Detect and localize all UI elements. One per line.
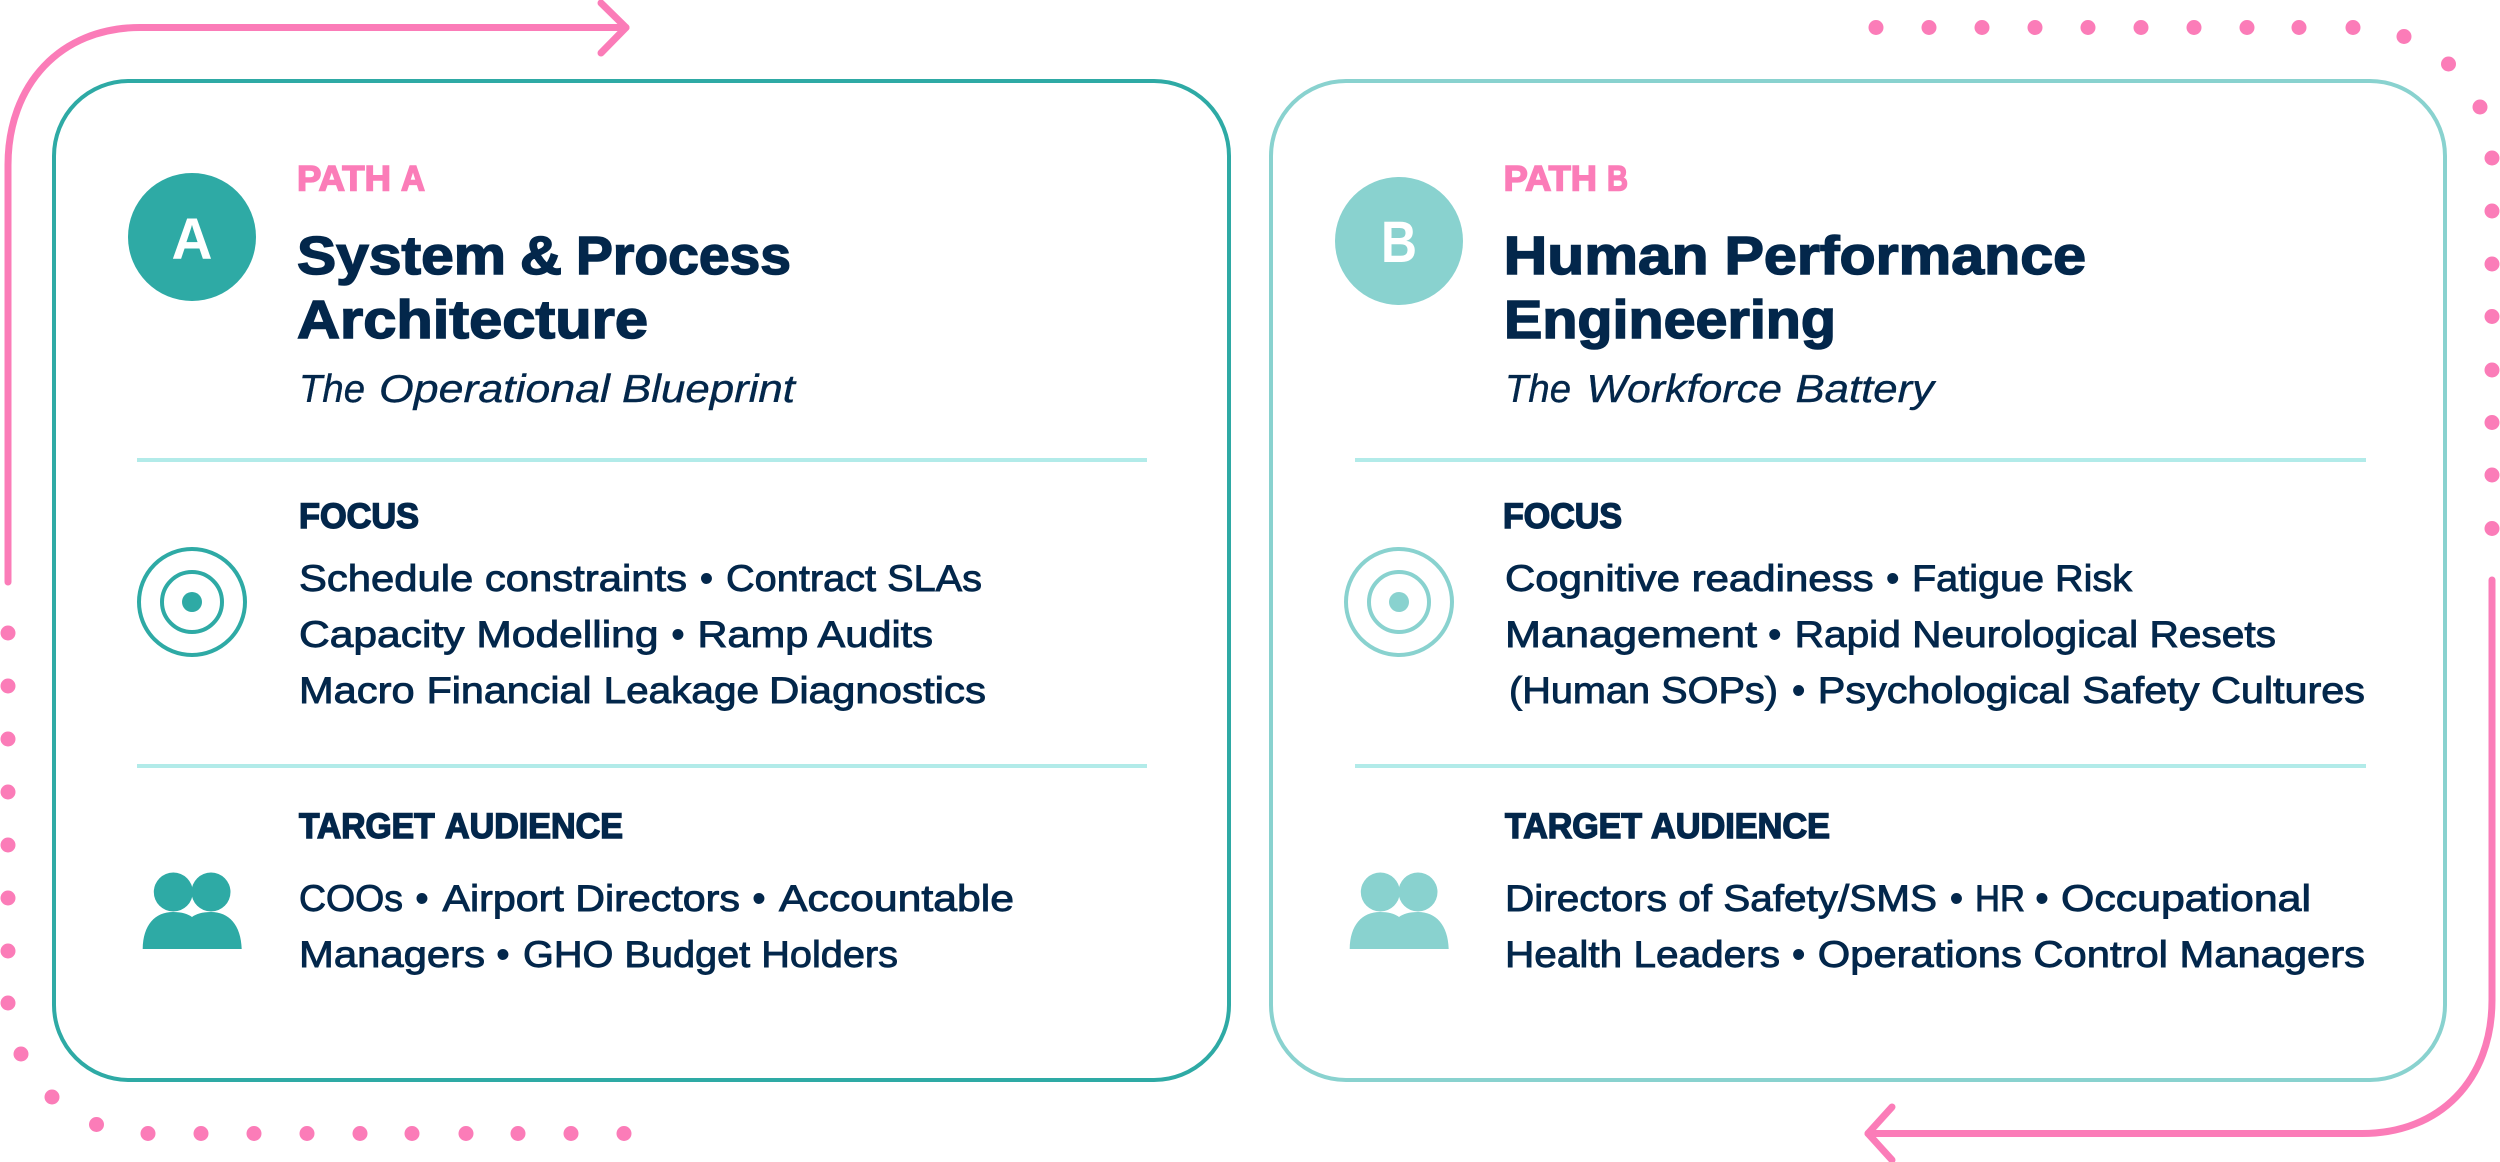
audience section A: Airport Directors [442, 878, 740, 919]
audience section B: HR [1975, 878, 2025, 919]
focus section B: • [1792, 670, 1805, 711]
card outline B [1271, 81, 2445, 1080]
heading: Human Performance Engineering: Performance [1724, 226, 2086, 286]
heading: System and Process Architecture: Architecture [297, 290, 648, 350]
focus section A [299, 497, 986, 711]
subtitle A [299, 368, 797, 411]
arrow: top-left solid flow arrow [8, 3, 626, 582]
subtitle A: The [299, 368, 365, 411]
audience section A: TARGET [299, 807, 435, 846]
focus section A: Schedule constraints [299, 558, 687, 599]
focus section B: Management [1505, 614, 1758, 655]
eyebrow: Path B: PATH [1504, 160, 1597, 198]
audience section B: Occupational [2061, 878, 2311, 919]
badge A [128, 173, 256, 301]
audience section A: Managers [299, 934, 485, 975]
heading: Human Performance Engineering: Human [1504, 226, 1709, 286]
focus section B: Rapid Neurological Resets [1795, 614, 2276, 655]
audience section B [1505, 807, 2365, 975]
badge B: B [1381, 210, 1417, 275]
heading: System and Process Architecture [297, 226, 791, 350]
focus section A: Financial [427, 670, 592, 711]
focus section B: • [1886, 558, 1899, 599]
focus section B [1503, 497, 2365, 711]
audience section A: AUDIENCE [445, 807, 623, 846]
focus section A: Capacity Modelling [299, 614, 658, 655]
arrow: bottom-right solid flow arrow [1868, 580, 2492, 1160]
focus section A: Diagnostics [769, 670, 986, 711]
heading: System and Process Architecture: & [520, 226, 562, 286]
panel: Path A [54, 81, 1229, 1080]
badge A: A [172, 207, 212, 272]
focus section A: • [700, 558, 713, 599]
dotted path: top-right [1868, 20, 2500, 536]
audience section A: • [497, 934, 509, 975]
audience section B: Operations Control Managers [1818, 934, 2365, 975]
audience section A [299, 807, 1014, 975]
focus section A: FOCUS [299, 497, 419, 536]
icon: target B [1346, 549, 1452, 655]
focus section B: • [1768, 614, 1781, 655]
focus section A: Ramp Audits [698, 614, 933, 655]
audience section A: • [753, 878, 765, 919]
eyebrow: Path B: B [1607, 160, 1628, 198]
focus section B: Fatigue Risk [1912, 558, 2133, 599]
audience section A: • [416, 878, 428, 919]
audience section A: GHO Budget Holders [523, 934, 898, 975]
eyebrow: Path A: PATH [297, 160, 391, 198]
focus section B: (Human SOPs) [1509, 670, 1778, 711]
audience section B: Directors of Safety/SMS [1505, 878, 1937, 919]
audience section B: • [1950, 878, 1963, 919]
card outline A [54, 81, 1229, 1080]
eyebrow: Path A: A [401, 160, 425, 198]
panel: Path B [1271, 81, 2445, 1080]
badge B [1335, 177, 1463, 305]
subtitle B: Workforce [1586, 368, 1782, 411]
subtitle A: Operational [379, 368, 612, 411]
audience section B: Health Leaders [1505, 934, 1780, 975]
audience section B: TARGET [1505, 807, 1642, 846]
focus section A: Leakage [604, 670, 759, 711]
heading: System and Process Architecture: Process [576, 226, 791, 286]
subtitle B: The [1505, 368, 1571, 411]
icon: people A [143, 872, 242, 949]
audience section A: Accountable [779, 878, 1014, 919]
focus section B: FOCUS [1503, 497, 1622, 536]
focus section A: • [672, 614, 684, 655]
audience section A: COOs [299, 878, 403, 919]
audience section B: • [1792, 934, 1805, 975]
heading: Human Performance Engineering [1504, 226, 2086, 350]
focus section B: Cognitive readiness [1505, 558, 1874, 599]
focus section A: Contract SLAs [726, 558, 982, 599]
subtitle B [1505, 368, 1937, 411]
subtitle A: Blueprint [622, 368, 797, 411]
icon: people B [1350, 872, 1449, 949]
heading: Human Performance Engineering: Engineering [1504, 290, 1836, 350]
icon: target A [139, 549, 245, 655]
focus section A: Macro [299, 670, 415, 711]
audience section B: AUDIENCE [1651, 807, 1830, 846]
dotted path: bottom-left [0, 626, 632, 1141]
heading: System and Process Architecture: System [297, 226, 506, 286]
audience section B: • [2036, 878, 2048, 919]
subtitle B: Battery [1796, 368, 1937, 411]
focus section B: Psychological Safety Cultures [1818, 670, 2365, 711]
